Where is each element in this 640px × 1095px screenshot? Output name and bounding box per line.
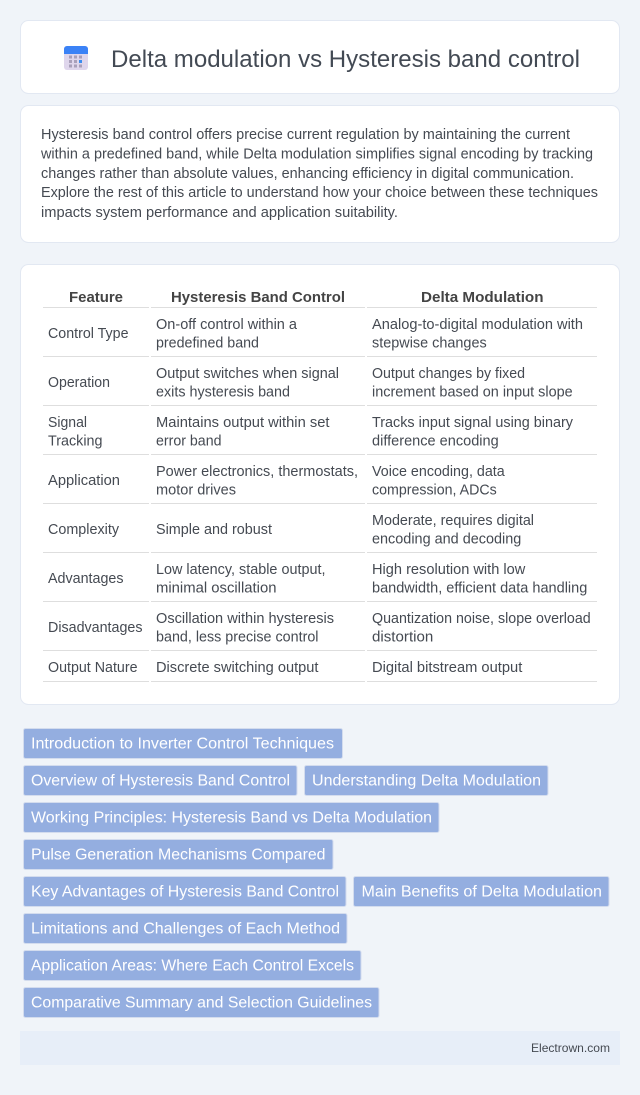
footer	[20, 1031, 620, 1065]
row: signal tracking: Signal	[48, 415, 87, 431]
panel: introduction	[20, 106, 620, 242]
row: control type: predefined band	[156, 336, 259, 352]
row: operation: Operation	[48, 375, 110, 391]
row: disadvantages: Disadvantages	[48, 620, 142, 636]
row: operation: exits hysteresis band	[156, 384, 290, 400]
title: Delta modulation vs Hysteresis band control	[111, 46, 580, 73]
tag: key advantages	[24, 876, 346, 906]
tag: overview	[24, 766, 297, 796]
tag: understanding: Understanding Delta Modulation	[312, 772, 541, 790]
row: application: Voice encoding, data	[372, 464, 505, 480]
row: control type	[43, 317, 597, 357]
table header row	[43, 290, 597, 308]
panel: comparison table	[20, 264, 620, 704]
row: application: motor drives	[156, 482, 236, 498]
topic tags	[24, 728, 609, 1018]
tag: overview: Overview of Hysteresis Band Control	[31, 772, 290, 790]
table header row: Feature	[69, 290, 123, 306]
row: advantages	[43, 562, 597, 602]
tag: introduction	[24, 728, 342, 758]
tag: introduction: Introduction to Inverter Control Techniques	[31, 736, 334, 752]
tag: main benefits: Main Benefits of Delta Modulation	[362, 884, 602, 900]
tag: pulse generation	[24, 840, 333, 870]
row: signal tracking	[43, 415, 597, 455]
row: advantages: Low latency, stable output,	[156, 562, 326, 578]
tag: key advantages: Key Advantages of Hysteresis Band Control	[31, 884, 339, 900]
row: application: Power electronics, thermostats,	[156, 464, 358, 480]
tag: pulse generation: Pulse Generation Mechanisms Compared	[31, 846, 326, 864]
row: complexity: encoding and decoding	[372, 532, 521, 548]
intro text block: changes rather than absolute values, enhancing efficiency in digital communication.	[41, 166, 574, 182]
row: operation: Output switches when signal	[156, 366, 339, 382]
row: control type: stepwise changes	[372, 336, 487, 352]
row: control type: On-off control within a	[156, 317, 297, 333]
row: operation	[43, 366, 597, 406]
tag: application areas: Application Areas: Where Each Control Excels	[31, 958, 354, 974]
tag: comparative summary	[24, 988, 379, 1018]
tag: working principles	[24, 802, 439, 832]
tag: comparative summary: Comparative Summary and Selection Guidelines	[31, 994, 372, 1012]
row: output nature: Digital bitstream output	[372, 660, 522, 676]
row: advantages: minimal oscillation	[156, 580, 277, 596]
row: complexity: Complexity	[48, 522, 120, 538]
row: disadvantages: Oscillation within hysteresis	[156, 611, 334, 627]
row: signal tracking: Tracks input signal using binary	[372, 415, 574, 431]
intro text block	[40, 127, 598, 221]
row: application: compression, ADCs	[372, 482, 497, 498]
tag: limitations: Limitations and Challenges of Each Method	[31, 920, 340, 938]
footer credit: Electrown.com	[531, 1041, 610, 1055]
row: advantages: High resolution with low	[372, 562, 526, 578]
table header row: Delta Modulation	[421, 290, 544, 306]
row: signal tracking: difference encoding	[372, 434, 499, 450]
row: signal tracking: error band	[156, 434, 222, 450]
tag: main benefits	[354, 876, 609, 906]
row: complexity	[43, 513, 597, 553]
intro text block: Hysteresis band control offers precise current regulation by maintaining the current	[41, 127, 570, 143]
tag: working principles: Working Principles: Hysteresis Band vs Delta Modulation	[31, 810, 432, 826]
intro text block: Explore the rest of this article to understand how your choice between these techniques	[41, 185, 598, 201]
intro text block: impacts system performance and application suitability.	[41, 205, 398, 221]
row: application: Application	[48, 473, 120, 489]
row: disadvantages	[43, 611, 597, 651]
row: disadvantages: band, less precise control	[156, 630, 318, 646]
table header row: Hysteresis Band Control	[171, 290, 345, 306]
row: control type: Control Type	[48, 326, 129, 342]
row: application	[43, 464, 597, 504]
row: operation: increment based on input slope	[372, 384, 573, 400]
row: disadvantages: distortion	[372, 630, 433, 646]
row: advantages: Advantages	[48, 571, 124, 587]
icon: calendar grid	[64, 46, 88, 70]
panel: header	[20, 20, 620, 94]
row: control type: Analog-to-digital modulation with	[372, 317, 583, 333]
row: output nature: Output Nature	[48, 660, 138, 676]
row: complexity: Moderate, requires digital	[372, 513, 534, 529]
intro text block: within a predefined band, while Delta modulation simplifies signal encoding by tracking	[40, 146, 593, 162]
tag: application areas	[24, 950, 361, 980]
tag: limitations	[24, 914, 347, 944]
row: output nature	[43, 660, 597, 682]
row: advantages: bandwidth, efficient data handling	[372, 580, 587, 596]
row: signal tracking: Maintains output within set	[156, 415, 330, 431]
tag: understanding	[304, 766, 548, 796]
row: complexity: Simple and robust	[156, 522, 272, 538]
row: disadvantages: Quantization noise, slope overload	[372, 611, 591, 627]
row: output nature: Discrete switching output	[156, 660, 319, 676]
row: signal tracking: Tracking	[48, 434, 103, 450]
row: operation: Output changes by fixed	[372, 366, 525, 382]
